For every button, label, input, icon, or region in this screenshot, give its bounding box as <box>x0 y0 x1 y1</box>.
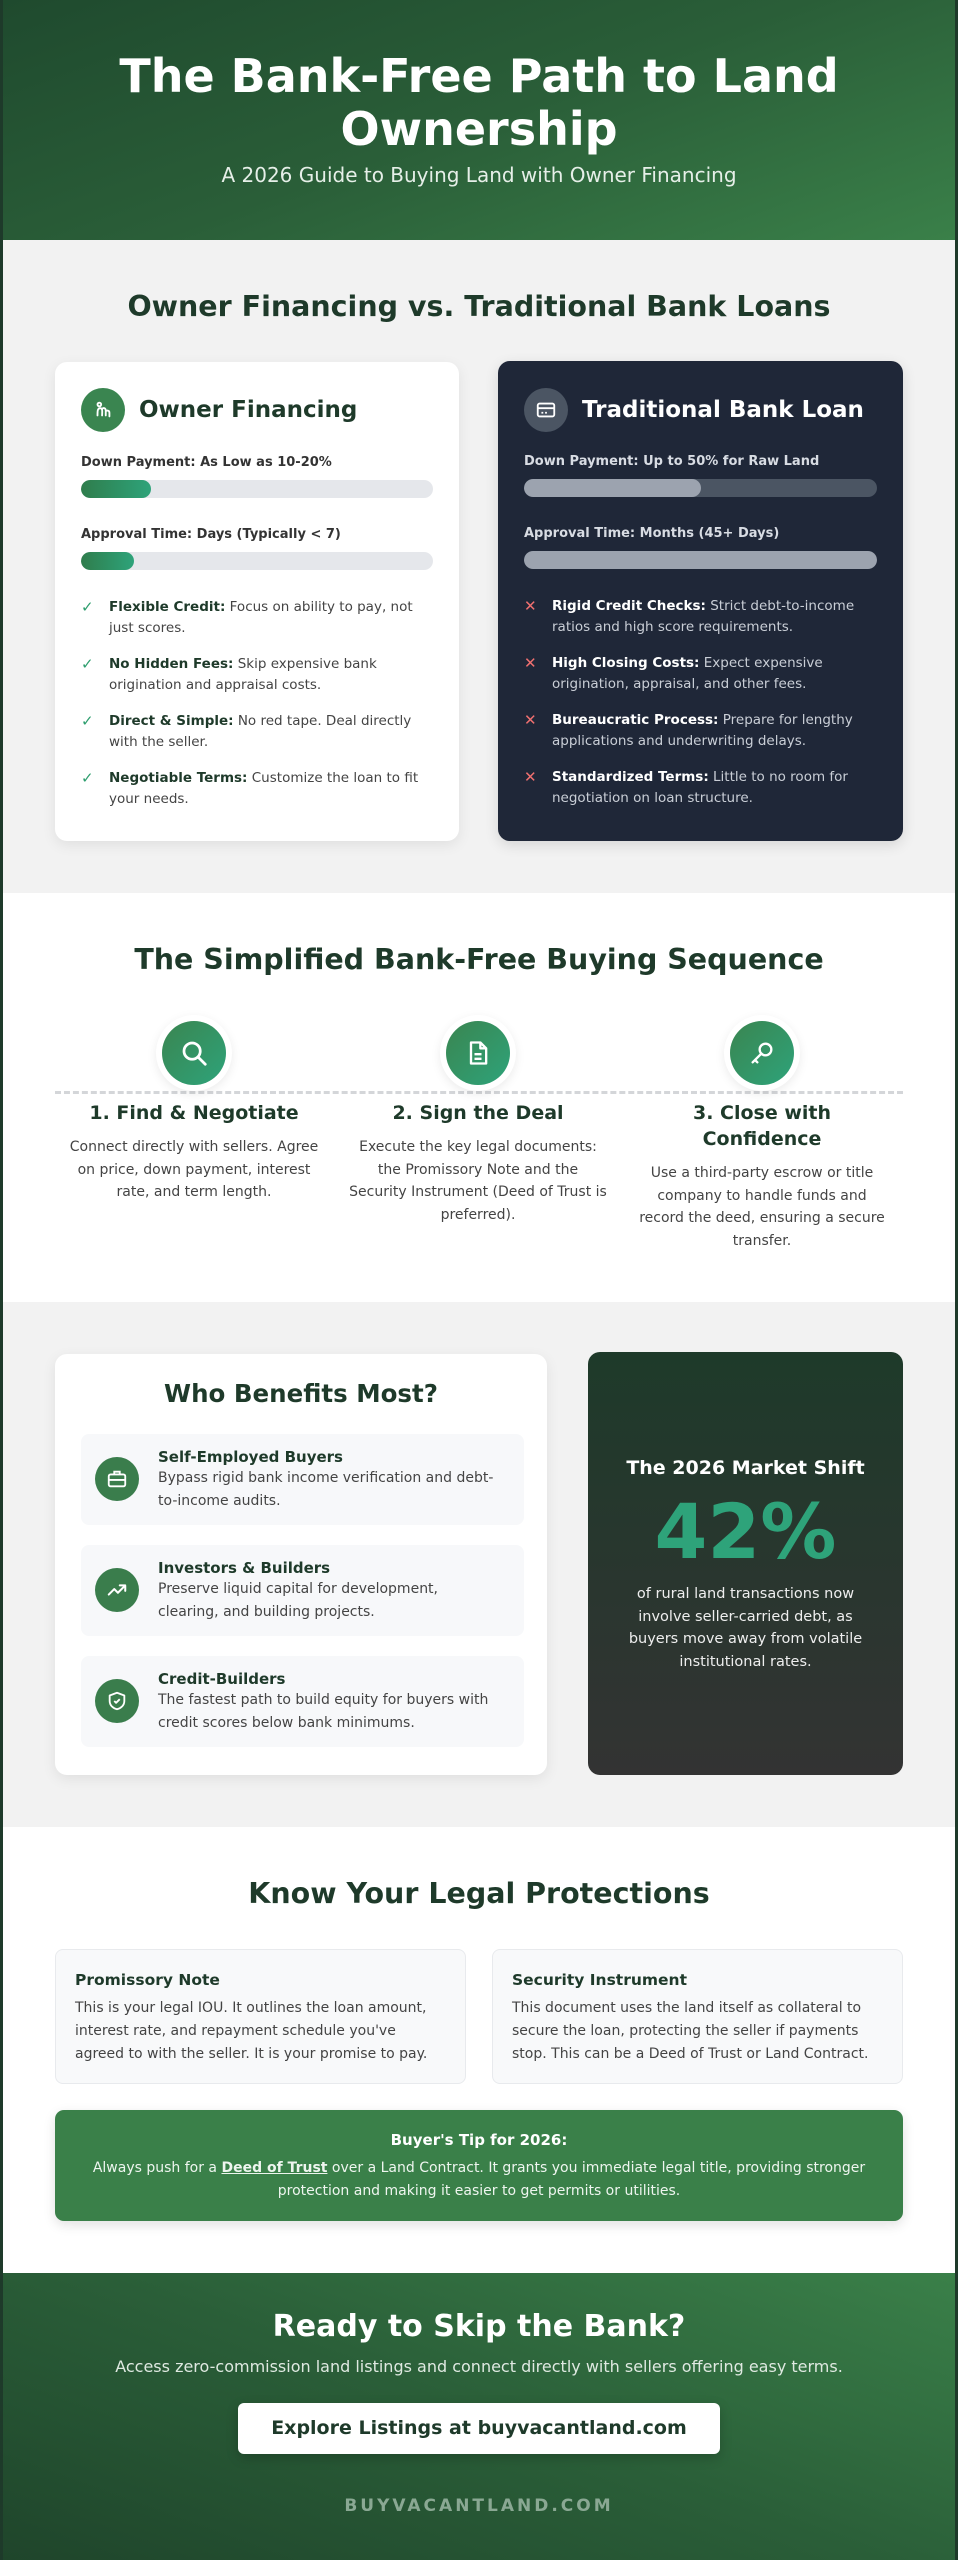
card header <box>81 388 357 432</box>
title: The Bank-Free Path to Land <box>119 49 839 103</box>
icon: document <box>446 1021 510 1085</box>
icon: briefcase <box>95 1457 139 1501</box>
metric: down payment: Down Payment: As Low as 10-20% <box>81 455 332 470</box>
title <box>119 49 839 156</box>
item: investors: Preserve liquid capital for development, clearing, and building projects. <box>158 1581 438 1620</box>
item: credit builders: The fastest path to build equity for buyers with credit scores below bank minimums. <box>158 1692 488 1730</box>
metric: down payment <box>524 454 877 497</box>
item: credit builders: Credit-Builders <box>158 1670 286 1688</box>
stat number: 42% <box>655 1487 836 1576</box>
benefits list <box>81 598 418 807</box>
metric: down payment <box>81 455 433 498</box>
section: buying sequence <box>3 893 955 1302</box>
benefits list: ✓ <box>81 712 94 730</box>
CTA heading: Ready to Skip the Bank? <box>273 2309 685 2344</box>
CTA text: Access zero-commission land listings and connect directly with sellers offering easy terms. <box>115 2357 843 2376</box>
item: self-employed: Self-Employed Buyers <box>158 1448 343 1466</box>
section: buying sequence: Confidence <box>703 1128 821 1150</box>
panel: who benefits <box>55 1354 547 1775</box>
header <box>3 0 955 240</box>
item: investors: Investors & Builders <box>158 1559 330 1577</box>
dashed timeline <box>55 1091 903 1094</box>
section: legal protections <box>3 1827 955 2273</box>
callout: buyer's tip: Buyer's Tip for 2026: <box>391 2131 567 2149</box>
section: buying sequence: Execute the key legal documents: the Promissory Note and the Security Instrument (Deed of Trust is preferred). <box>349 1139 607 1222</box>
callout: buyer's tip <box>55 2110 903 2221</box>
box: security instrument <box>492 1949 903 2084</box>
step 2 <box>349 1021 607 1222</box>
heading: comparison: Owner Financing vs. Traditional Bank Loans <box>127 290 831 323</box>
panel: traditional bank loan <box>498 361 903 841</box>
drawbacks list: ✕ <box>524 768 537 786</box>
section: buying sequence: 2. Sign the Deal <box>392 1102 564 1124</box>
icon: key <box>730 1021 794 1085</box>
icon: shield <box>95 1679 139 1723</box>
drawbacks list: Standardized Terms: Little to no room for negotiation on loan structure. <box>552 769 848 806</box>
heading: who benefits: Who Benefits Most? <box>164 1379 438 1408</box>
metric: down payment: Down Payment: Up to 50% for Raw Land <box>524 454 819 469</box>
benefits list: No Hidden Fees: Skip expensive bank origination and appraisal costs. <box>109 656 377 693</box>
metric: approval time <box>524 526 877 569</box>
section: buying sequence: Connect directly with sellers. Agree on price, down payment, interest rate, and term length. <box>70 1139 318 1200</box>
CTA button: Explore Listings at buyvacantland.com <box>271 2417 687 2439</box>
CTA button <box>238 2403 720 2454</box>
stat heading: The 2026 Market Shift <box>626 1457 865 1479</box>
box: security instrument: This document uses the land itself as collateral to secure the loan, protecting the seller if payments stop. This can be a Deed of Trust or Land Contract. <box>512 2000 868 2062</box>
drawbacks list: ✕ <box>524 654 537 672</box>
callout: buyer's tip: Always push for a Deed of Trust over a Land Contract. It grants you immediate legal title, providing stronger protection and making it easier to get permits or utilities. <box>93 2160 865 2199</box>
brand: BUYVACANTLAND.COM <box>344 2496 614 2516</box>
item: credit builders <box>81 1656 524 1747</box>
section: comparison <box>3 240 955 893</box>
icon: hand coins <box>81 388 125 432</box>
subtitle: A 2026 Guide to Buying Land with Owner Financing <box>221 163 737 187</box>
benefits list: ✓ <box>81 598 94 616</box>
title: Ownership <box>340 102 618 156</box>
drawbacks list: High Closing Costs: Expect expensive origination, appraisal, and other fees. <box>552 655 823 692</box>
benefits list: ✓ <box>81 769 94 787</box>
step 1 <box>70 1021 318 1200</box>
stat description: of rural land transactions now involve seller-carried debt, as buyers move away from volatile institutional rates. <box>629 1586 862 1670</box>
section: buying sequence: 1. Find & Negotiate <box>89 1102 299 1124</box>
box: security instrument: Security Instrument <box>512 1971 687 1989</box>
item: self-employed <box>81 1434 524 1525</box>
icon: search <box>162 1021 226 1085</box>
benefits list: Direct & Simple: No red tape. Deal directly with the seller. <box>109 713 411 750</box>
heading: sequence: The Simplified Bank-Free Buying Sequence <box>134 943 824 976</box>
benefits list: ✓ <box>81 655 94 673</box>
card header: Traditional Bank Loan <box>582 397 864 423</box>
drawbacks list: ✕ <box>524 711 537 729</box>
section: buying sequence: 3. Close with <box>693 1102 831 1124</box>
item: investors <box>81 1545 524 1636</box>
panel: owner financing <box>55 362 459 841</box>
drawbacks list: ✕ <box>524 597 537 615</box>
card header: Owner Financing <box>139 397 357 423</box>
step 3 <box>639 1021 885 1248</box>
benefits list: Flexible Credit: Focus on ability to pay, not just scores. <box>109 599 413 636</box>
heading: legal: Know Your Legal Protections <box>248 1877 710 1910</box>
metric: approval time: Approval Time: Days (Typically < 7) <box>81 527 341 542</box>
drawbacks list: Rigid Credit Checks: Strict debt-to-income ratios and high score requirements. <box>552 598 854 635</box>
box: promissory note: Promissory Note <box>75 1971 220 1989</box>
box: promissory note <box>55 1949 466 2084</box>
item: self-employed: Bypass rigid bank income verification and debt-to-income audits. <box>158 1470 493 1508</box>
metric: approval time <box>81 527 433 570</box>
drawbacks list <box>524 597 854 806</box>
icon: trending up <box>95 1568 139 1612</box>
icon: credit card <box>524 388 568 432</box>
benefits list: Negotiable Terms: Customize the loan to fit your needs. <box>109 770 418 807</box>
section: buying sequence: Use a third-party escrow or title company to handle funds and record the deed, ensuring a secure transfer. <box>639 1165 885 1248</box>
drawbacks list: Bureaucratic Process: Prepare for lengthy applications and underwriting delays. <box>552 712 853 749</box>
footer CTA <box>3 2273 955 2560</box>
metric: approval time: Approval Time: Months (45+ Days) <box>524 526 779 541</box>
section: benefits <box>3 1302 955 1827</box>
box: promissory note: This is your legal IOU. It outlines the loan amount, interest rate, and repayment schedule you've agreed to with the seller. It is your promise to pay. <box>75 2000 427 2062</box>
panel: market shift stat <box>588 1352 903 1775</box>
card header <box>524 388 864 432</box>
